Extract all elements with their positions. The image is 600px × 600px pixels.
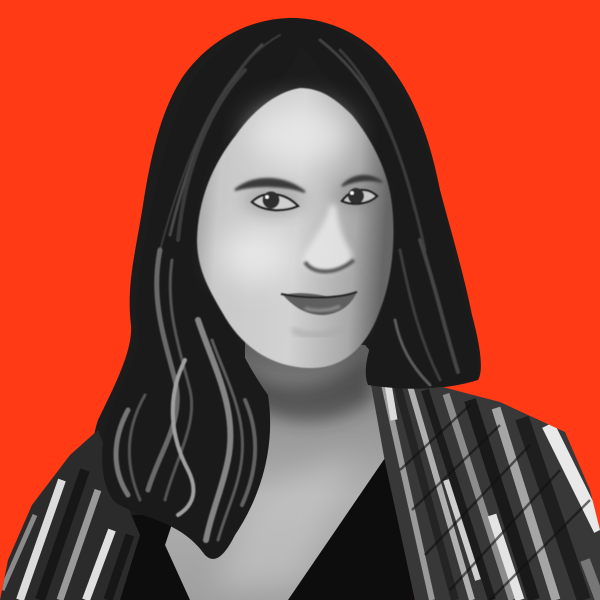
left eye bbox=[252, 192, 298, 210]
nose shading bbox=[303, 205, 352, 272]
black top bbox=[118, 458, 415, 600]
chin shadow bbox=[292, 328, 345, 335]
right eye bbox=[342, 188, 377, 204]
forehead highlight bbox=[250, 105, 350, 165]
jacket left bbox=[0, 420, 145, 600]
mouth bbox=[281, 292, 357, 315]
left eyebrow bbox=[235, 179, 305, 192]
right eyebrow bbox=[342, 176, 382, 186]
face bbox=[197, 88, 394, 368]
eye socket shadows bbox=[245, 182, 382, 214]
hair front bbox=[102, 18, 478, 559]
hair back bbox=[91, 18, 481, 562]
cheek highlight bbox=[220, 227, 290, 283]
jacket right bbox=[371, 386, 600, 600]
neck and chest bbox=[130, 340, 395, 600]
